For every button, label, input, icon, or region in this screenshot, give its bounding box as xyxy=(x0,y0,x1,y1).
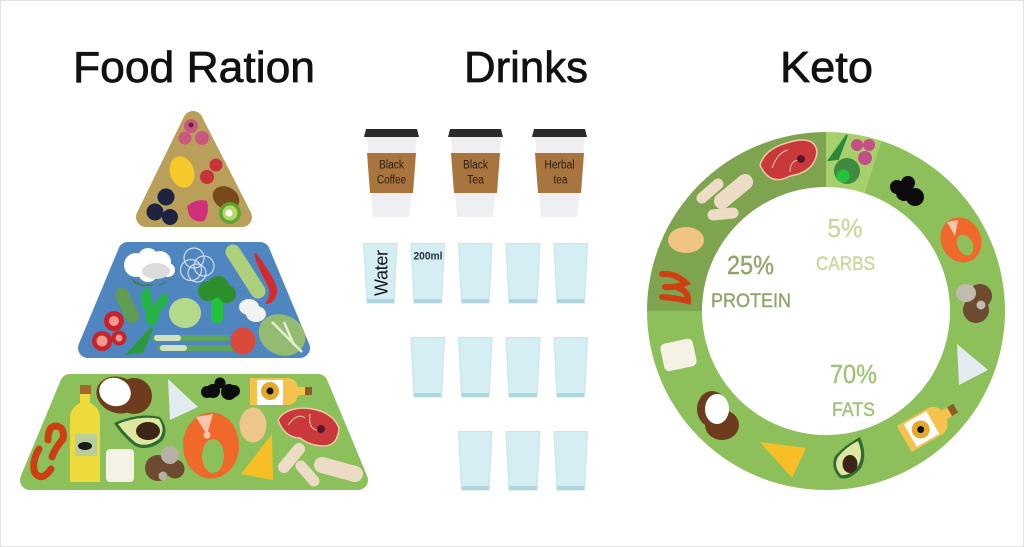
icon: raspberry xyxy=(187,200,208,221)
icon: green sprig xyxy=(129,328,152,353)
icon: ring oil bottle xyxy=(897,396,964,452)
icon: blackberries xyxy=(146,188,178,225)
icon: glass labelled 200ml xyxy=(411,244,444,303)
segment: carbs 5% xyxy=(826,132,881,193)
icon: black tea cup: Black xyxy=(463,160,488,172)
label: fats 70%: 70% xyxy=(830,359,877,389)
label: protein 25%: PROTEIN xyxy=(711,291,791,312)
icon: egg xyxy=(240,408,266,442)
icon: oil bottle sideways xyxy=(250,378,312,405)
icon: ring avocado xyxy=(833,437,864,479)
icon: shrimp xyxy=(34,426,63,477)
panel: coffee and tea cups xyxy=(364,129,587,217)
icon: chili pepper xyxy=(254,253,277,304)
panel: fats and protein pyramid tier xyxy=(30,371,358,482)
icon: onion rings xyxy=(180,248,214,282)
icon: lemon xyxy=(166,153,198,191)
icon: black coffee cup xyxy=(364,129,419,217)
icon: berries flower xyxy=(178,119,209,145)
panel: fruit pyramid tier xyxy=(146,119,244,225)
icon: asparagus xyxy=(155,338,231,348)
icon: tomato slices xyxy=(92,311,126,351)
icon: herbal tea cup: tea xyxy=(554,174,568,186)
icon: herbal tea cup: Herbal xyxy=(544,160,574,172)
icon: ring egg xyxy=(668,227,704,253)
icon: ring shrimp xyxy=(662,274,688,301)
icon: green leaves xyxy=(140,288,171,326)
icon: lettuce xyxy=(252,307,312,363)
icon: herbal tea cup xyxy=(532,129,587,217)
icon: cherries xyxy=(200,158,222,184)
label: protein 25%: 25% xyxy=(727,250,774,280)
icon: cucumber xyxy=(122,295,132,316)
icon: ring mushrooms xyxy=(956,284,992,323)
icon: broccoli xyxy=(198,276,236,323)
label: fats 70% xyxy=(830,359,877,421)
label: carbs 5% xyxy=(816,213,875,275)
panel: water glasses xyxy=(364,244,588,490)
icon: kiwi xyxy=(208,181,244,224)
icon: red pepper xyxy=(230,328,256,354)
icon: black tea cup xyxy=(448,129,503,217)
icon: ring steak xyxy=(760,140,817,180)
icon: ring coconut xyxy=(697,391,739,440)
icon: avocado xyxy=(114,415,166,448)
label: protein 25% xyxy=(711,250,791,312)
icon: salmon steak xyxy=(183,412,239,478)
icon: olive oil bottle xyxy=(70,385,100,482)
icon: coconut xyxy=(91,371,152,419)
icon: ring tofu xyxy=(659,338,698,372)
icon: ring blue cheese xyxy=(957,344,988,385)
title: Drinks: Drinks xyxy=(464,43,588,92)
icon: black tea cup: Tea xyxy=(467,174,485,186)
title: Keto: Keto xyxy=(780,43,873,92)
panel: keto ring chart xyxy=(647,132,1005,490)
icon: tofu xyxy=(106,449,134,482)
icon: ring carbs vegetables and berries xyxy=(829,135,875,184)
icon: glass labelled 200ml: 200ml xyxy=(414,250,442,262)
icon: ring salmon xyxy=(933,211,989,269)
icon: mushrooms xyxy=(145,446,184,481)
panel: vegetable pyramid tier xyxy=(88,248,312,363)
segment: protein 25% xyxy=(647,132,826,311)
icon: zucchini xyxy=(233,252,258,291)
title: Food Ration: Food Ration xyxy=(73,43,315,92)
label: carbs 5%: 5% xyxy=(828,213,862,243)
label: carbs 5%: CARBS xyxy=(816,254,875,275)
icon: mushroom xyxy=(239,299,266,322)
icon: ring chicken xyxy=(702,182,745,215)
icon: water glass labelled water: Water xyxy=(372,250,392,296)
icon: cabbage xyxy=(169,298,201,328)
icon: blue cheese xyxy=(168,379,198,420)
icon: black coffee cup: Coffee xyxy=(377,174,406,186)
icon: ring yellow cheese xyxy=(760,442,806,478)
segment: fats 70% xyxy=(647,141,1005,490)
icon: black coffee cup: Black xyxy=(379,160,404,172)
icon: water glass labelled water xyxy=(364,244,397,303)
icon: steak xyxy=(278,408,339,446)
label: fats 70%: FATS xyxy=(832,400,875,421)
icon: cauliflower xyxy=(123,248,177,286)
icon: ring olives xyxy=(890,176,924,206)
icon: yellow cheese xyxy=(241,434,273,480)
icon: chicken xyxy=(284,449,355,481)
icon: olives xyxy=(201,378,240,400)
